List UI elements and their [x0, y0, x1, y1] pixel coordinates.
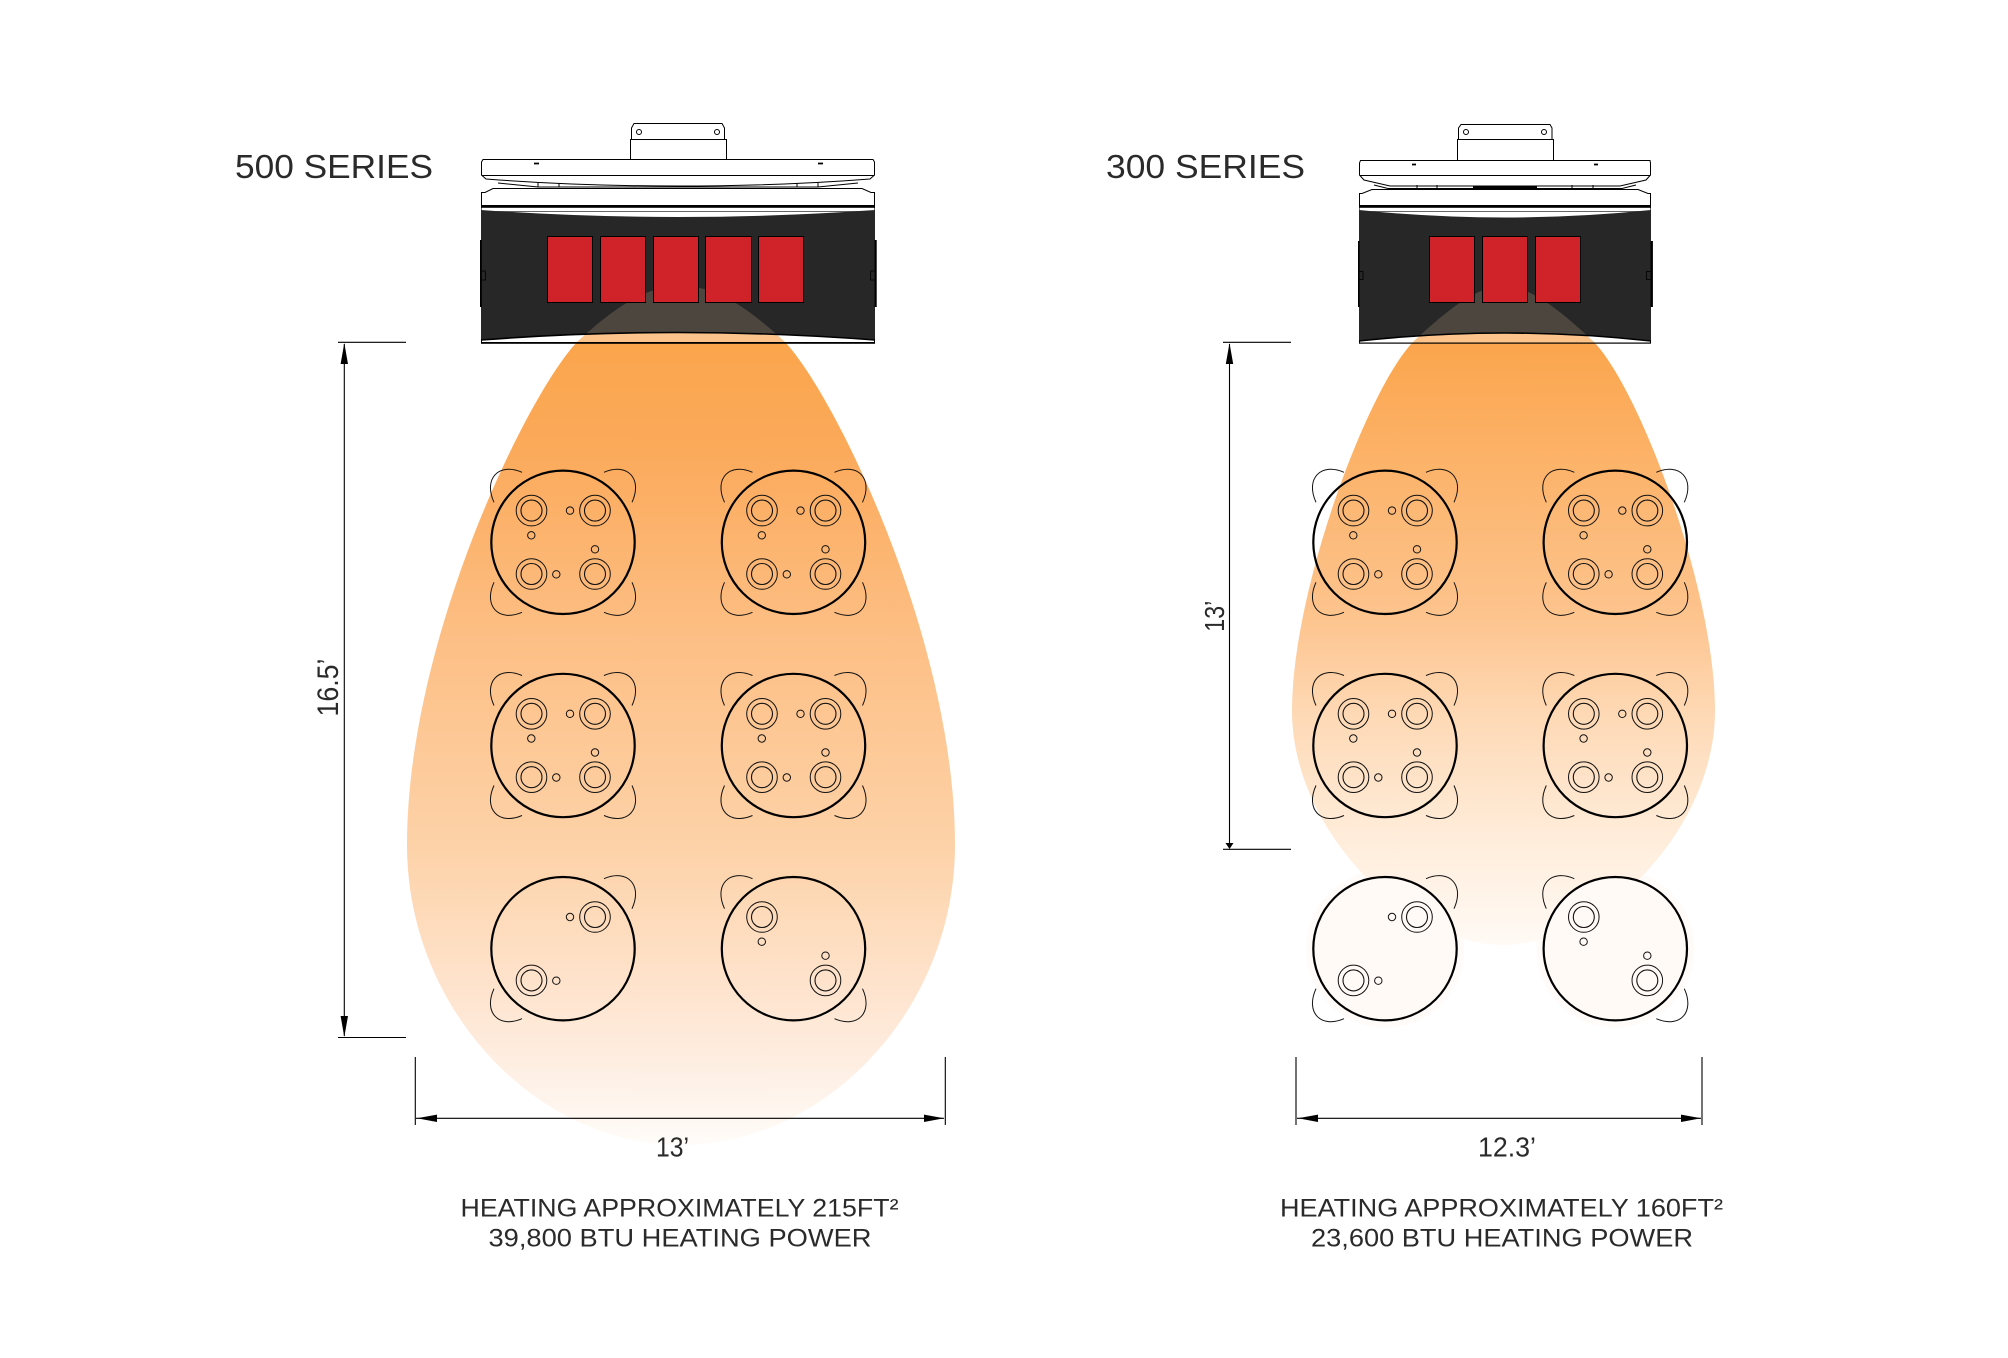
upper housing band	[1360, 190, 1650, 206]
dimension: width 13 ft: 13’	[656, 1132, 689, 1163]
heat pattern: 300 series flame	[1292, 286, 1715, 945]
caption: 300 series: HEATING APPROXIMATELY 160FT²	[1280, 1195, 1723, 1223]
table	[490, 672, 636, 819]
table	[1543, 876, 1688, 1022]
caption: 500 series: 39,800 BTU HEATING POWER	[488, 1225, 872, 1253]
lower lens	[1359, 333, 1651, 343]
flame showing through housing	[586, 288, 776, 334]
panel: 500 series	[235, 124, 955, 1253]
table	[1543, 469, 1688, 615]
lower lens	[481, 332, 875, 342]
heading: 500 series: 500 SERIES	[235, 149, 433, 186]
heater: 300 series	[1358, 124, 1653, 344]
dimension: height 13 ft	[1199, 342, 1291, 849]
upper housing band	[482, 188, 874, 206]
red heating elements	[548, 236, 804, 302]
panel: 300 series	[1106, 124, 1723, 1253]
dimension: width 13 ft	[415, 1057, 945, 1163]
table	[1543, 672, 1688, 819]
heater: 500 series	[480, 124, 877, 344]
caption: 500 series: HEATING APPROXIMATELY 215FT²	[460, 1195, 898, 1223]
dimension: height 16.5 ft: 16.5’	[312, 658, 345, 716]
table	[1312, 469, 1458, 615]
dimension: width 12.3 ft: 12.3’	[1478, 1132, 1536, 1163]
table	[1312, 876, 1458, 1022]
red heating elements	[1430, 236, 1580, 302]
side brackets	[480, 240, 877, 307]
heading: 300 series: 300 SERIES	[1106, 149, 1305, 186]
mounting plate	[482, 160, 874, 187]
caption: 300 series: 23,600 BTU HEATING POWER	[1311, 1225, 1693, 1253]
dining tables: 500 series	[490, 469, 866, 1022]
heat pattern: 500 series flame	[407, 286, 955, 1145]
table	[1312, 672, 1458, 819]
dimension: width 12.3 ft	[1296, 1057, 1702, 1163]
mounting bracket	[1458, 124, 1554, 160]
caption: 500 series	[460, 1195, 898, 1253]
table	[721, 672, 866, 819]
table	[721, 469, 866, 615]
dining tables: 300 series	[1312, 469, 1688, 1022]
table	[490, 469, 636, 615]
mounting bracket	[630, 124, 726, 160]
dimension: height 16.5 ft	[312, 342, 406, 1038]
housing body	[481, 210, 875, 340]
housing body	[1359, 210, 1651, 341]
side brackets	[1358, 241, 1653, 307]
flame showing through housing	[1420, 290, 1586, 335]
faint halo behind lower tables	[1306, 870, 1694, 1028]
table	[490, 876, 636, 1022]
table	[721, 876, 866, 1022]
dimension: height 13 ft: 13’	[1199, 601, 1230, 632]
mounting plate	[1360, 160, 1650, 189]
caption: 300 series	[1280, 1195, 1723, 1253]
